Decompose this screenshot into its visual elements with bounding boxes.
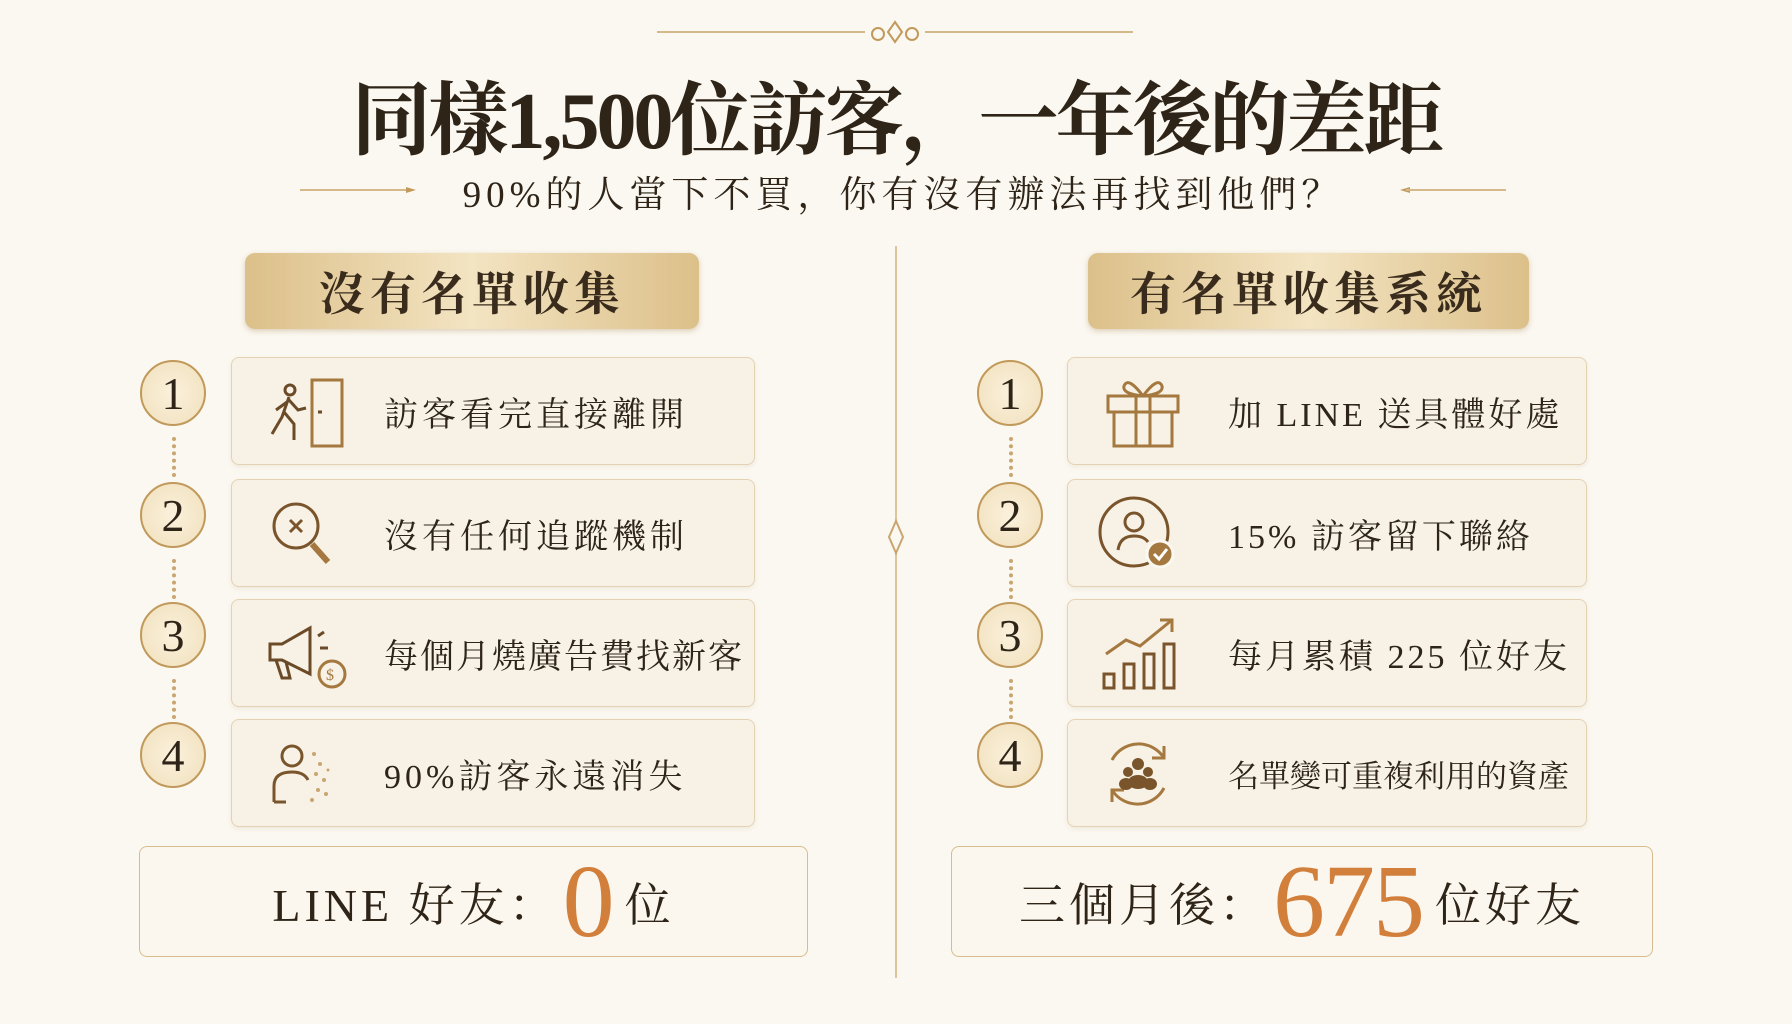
step 1 left: 訪客看完直接離開 [384, 396, 688, 434]
step 4 left: 90%訪客永遠消失 [384, 758, 686, 796]
step 3 right: 每月累積 225 位好友 [1228, 638, 1570, 676]
step 3 right [977, 599, 1588, 710]
result left: LINE 好友： 位 [272, 880, 675, 930]
panel: with list [951, 252, 1653, 958]
step 4 right: 名單變可重複利用的資產 [1228, 758, 1569, 794]
step 1 left: 1 [162, 368, 184, 418]
step 1 right: 加 LINE 送具體好處 [1228, 396, 1562, 434]
step 3 left: 3 [162, 610, 184, 660]
step 3 left [140, 599, 756, 710]
step 3 right: 3 [998, 610, 1022, 660]
step 4 left [140, 719, 756, 830]
title: 同樣1,500位訪客，一年後的差距 [352, 78, 1440, 166]
step 3 left: $ [326, 667, 334, 684]
panel: without list [139, 252, 808, 958]
subtitle: 90%的人當下不買，你有沒有辦法再找到他們？ [463, 175, 1343, 216]
step 1 right [977, 357, 1588, 468]
heading right [1088, 253, 1529, 329]
step 4 right [977, 719, 1588, 830]
step 2 right: 2 [998, 490, 1022, 540]
step 2 left: 沒有任何追蹤機制 [384, 518, 688, 556]
result right: 675 [1273, 844, 1423, 958]
step 3 left: 每個月燒廣告費找新客 [384, 638, 744, 676]
step 2 left [140, 479, 756, 590]
step 2 right [977, 479, 1588, 590]
heading left [245, 253, 699, 329]
step 1 right: 1 [998, 368, 1022, 418]
heading left: 沒有名單收集 [319, 269, 625, 320]
top ornament [657, 20, 1133, 44]
step 2 right: 15% 訪客留下聯絡 [1228, 518, 1533, 556]
result left: 0 [563, 844, 613, 958]
result right [951, 846, 1653, 957]
heading right: 有名單收集系統 [1130, 269, 1487, 320]
divider [888, 246, 904, 978]
step 4 right: 4 [998, 730, 1022, 780]
result right: 三個月後： 位好友 [1019, 880, 1585, 930]
result left [139, 846, 808, 957]
step 1 left [140, 357, 756, 468]
step 2 left: 2 [162, 490, 184, 540]
step 4 left: 4 [162, 730, 184, 780]
